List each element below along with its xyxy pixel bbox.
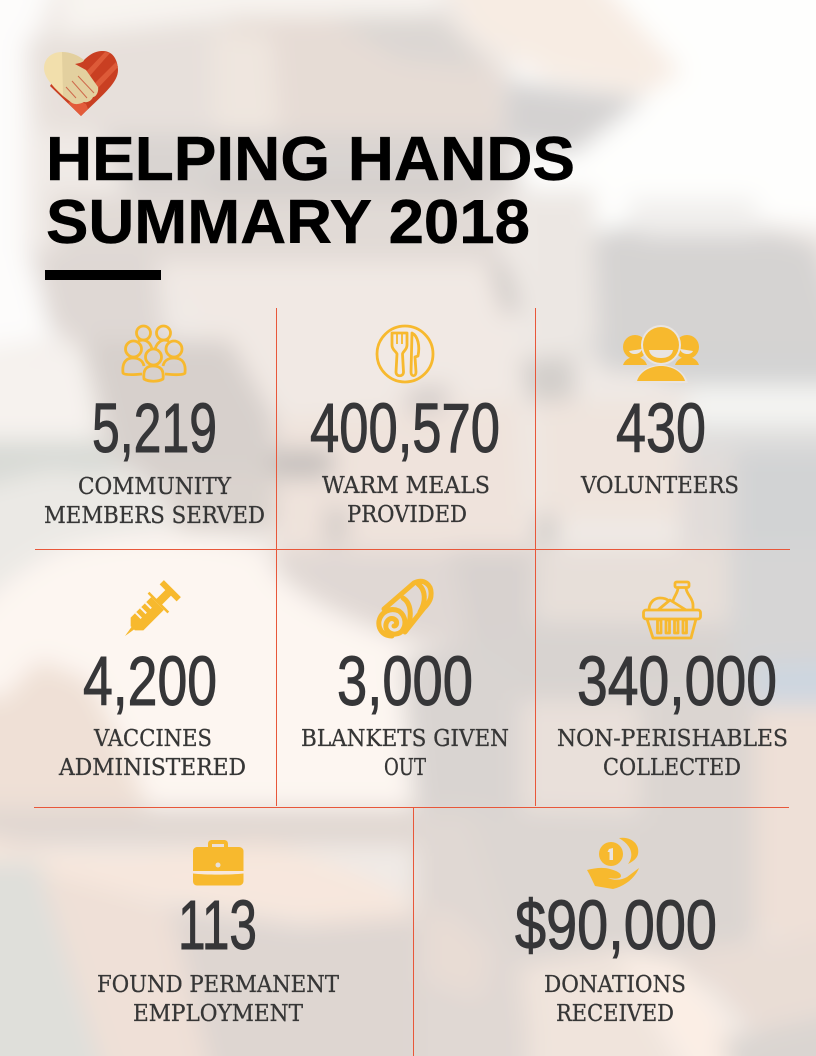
statistic: $90,000 [515,886,717,964]
label: EMPLOYMENT [133,999,303,1027]
label: FOUND PERMANENT [97,970,339,998]
label: WARM MEALS [322,471,490,499]
panel: warm meals provided [310,326,500,528]
statistic: 4,200 [83,642,217,720]
grid lines [34,308,790,1056]
panel: vaccines administered [58,579,246,781]
label: ADMINISTERED [58,753,246,781]
label: MEMBERS SERVED [44,501,265,529]
label: OUT [384,753,426,781]
icon: food basket [644,582,700,638]
icon: three smiling people [623,325,699,383]
label [97,970,339,1027]
statistic: 400,570 [310,389,500,467]
panel: non-perishables collected [557,582,788,781]
icon: hand with coins [587,838,639,889]
label: BLANKETS GIVEN [301,724,509,752]
label [544,970,686,1027]
panel: community members served [44,326,265,529]
panel: donations received [515,838,717,1027]
label [301,724,509,781]
label: RECEIVED [556,999,674,1027]
statistic: 430 [616,389,706,467]
panel: found permanent employment [97,840,339,1027]
label: VACCINES [93,724,212,752]
icon: rolled blanket [379,581,431,636]
statistic: 5,219 [92,389,217,467]
panel: blankets given out [301,581,509,781]
label: COMMUNITY [78,472,231,500]
label: PROVIDED [347,500,467,528]
label: NON-PERISHABLES [557,724,788,752]
logo: heart with hand [44,51,118,116]
label: DONATIONS [544,970,686,998]
label [557,724,788,781]
icon: fork and knife in circle [377,326,433,382]
statistic: 113 [178,886,257,964]
label: VOLUNTEERS [580,471,739,499]
title underline bar [45,270,161,280]
label [58,724,246,781]
panel: volunteers [580,325,739,499]
label [322,471,490,528]
title: HELPING HANDS [46,125,575,194]
label [44,472,265,529]
icon: briefcase [193,840,244,886]
title: SUMMARY 2018 [46,188,530,257]
icon: group of people [123,326,185,381]
icon: syringe [115,579,182,646]
statistic: 3,000 [337,642,473,720]
title [46,125,575,257]
label: COLLECTED [603,753,741,781]
